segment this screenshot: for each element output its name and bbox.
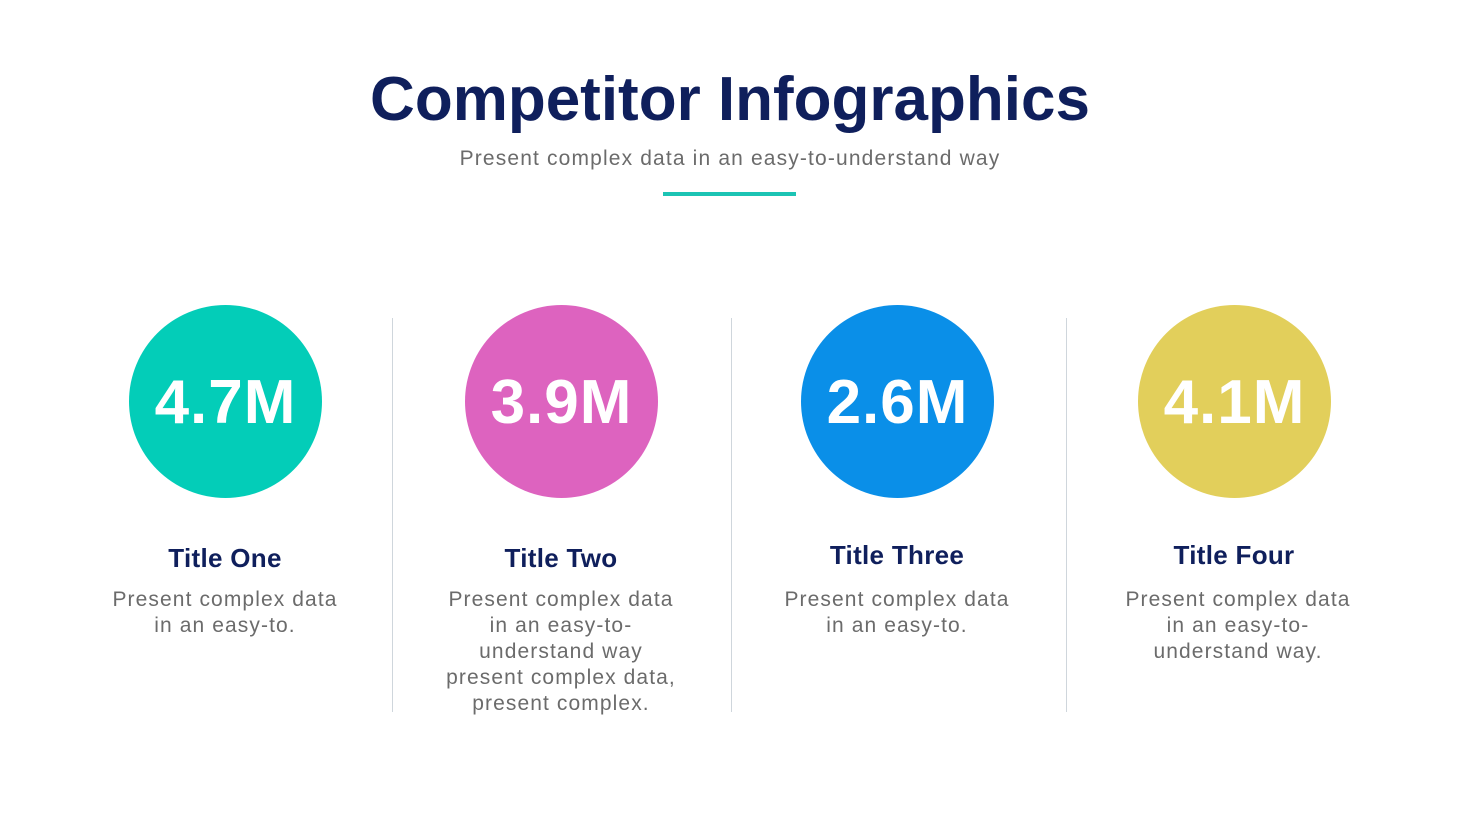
text: three [784,588,1010,637]
circle: 4.1M: 4.1M [1164,368,1305,437]
circle: 4.7M [129,305,322,498]
text: three: Present complex data [784,588,1010,611]
panel: three [784,305,1010,637]
panel: two [446,305,676,715]
accent underline [663,192,796,196]
text: two: understand way [479,640,643,663]
circle: 4.1M [1138,305,1331,498]
text: one [112,588,338,637]
heading: Title Four: Title Four [1174,540,1294,570]
text: one: Present complex data [112,588,338,611]
text: two: present complex. [472,692,650,715]
text: two: Present complex data [448,588,674,611]
heading: Title One: Title One [168,543,282,573]
text: four [1125,588,1351,663]
subtitle: Present complex data in an easy-to-understand way [460,147,1000,170]
circle: 3.9M: 3.9M [491,368,632,437]
text: four: Present complex data [1125,588,1351,611]
heading: Title Two: Title Two [505,543,617,573]
text: one: in an easy-to. [154,614,296,637]
title: Competitor Infographics [370,65,1090,134]
text: two: present complex data, [446,666,676,689]
heading: Title Three: Title Three [830,540,964,570]
panel: one [112,305,338,637]
text: three: in an easy-to. [826,614,968,637]
text: two: in an easy-to- [490,614,632,637]
text: four: understand way. [1153,640,1323,663]
text: two [446,588,676,715]
circle: 4.7M: 4.7M [155,368,296,437]
circle: 2.6M: 2.6M [827,368,968,437]
circle: 2.6M [801,305,994,498]
text: four: in an easy-to- [1167,614,1309,637]
panel: four [1125,305,1351,663]
circle: 3.9M [465,305,658,498]
